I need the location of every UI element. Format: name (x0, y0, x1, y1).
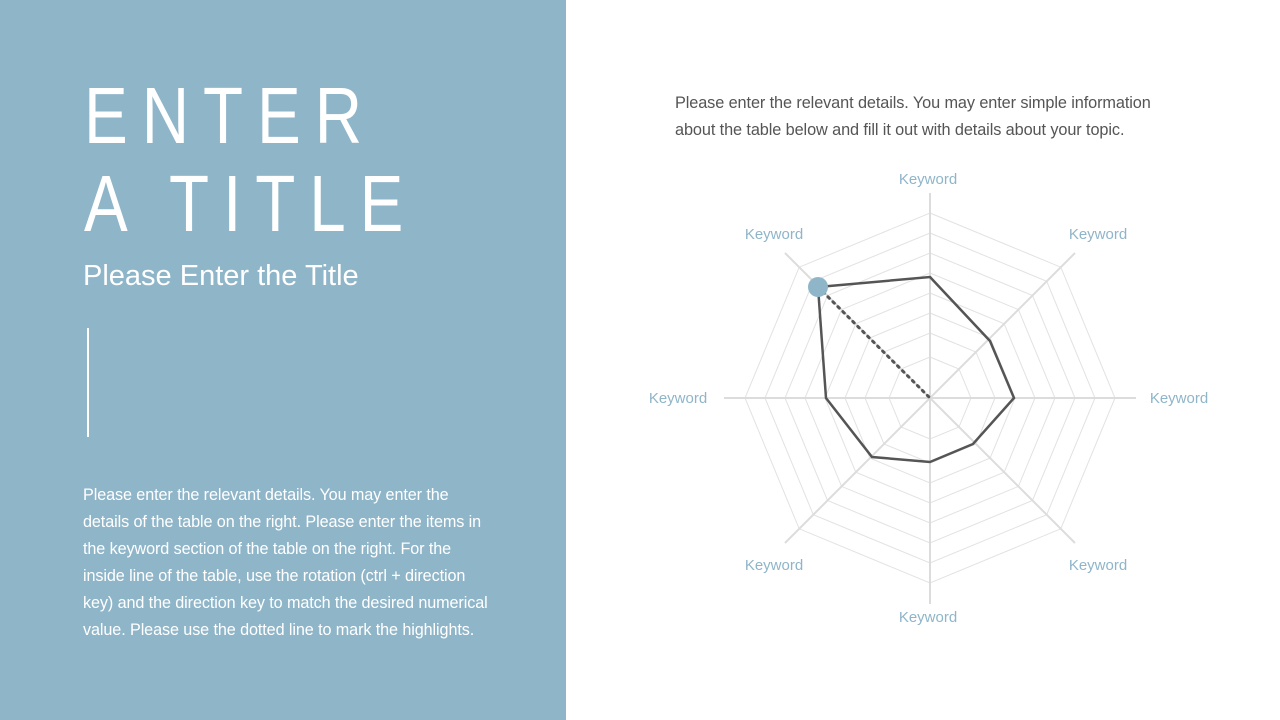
intro text: Please enter the relevant details. You may enter simple information (675, 94, 1151, 112)
body text: the keyword section of the table on the right. For the (83, 540, 451, 558)
keyword labels: Keyword (1069, 557, 1127, 574)
panel: left title panel (0, 0, 566, 720)
title: ENTER (84, 71, 376, 160)
intro text: about the table below and fill it out with details about your topic. (675, 121, 1124, 139)
keyword labels: Keyword (745, 557, 803, 574)
data polygon (818, 277, 1014, 462)
intro text (675, 94, 1151, 139)
keyword labels: Keyword (899, 609, 957, 626)
keyword labels: Keyword (1150, 390, 1208, 407)
keyword labels (649, 171, 1208, 626)
highlight dot (808, 277, 828, 297)
vertical accent line (87, 328, 89, 437)
highlight dotted line (818, 287, 930, 398)
keyword labels: Keyword (745, 226, 803, 243)
body text: inside line of the table, use the rotation (ctrl + direction (83, 567, 465, 585)
body text: details of the table on the right. Please enter the items in (83, 513, 481, 531)
body text: value. Please use the dotted line to mark the highlights. (83, 621, 474, 639)
keyword labels: Keyword (899, 171, 957, 188)
keyword labels: Keyword (1069, 226, 1127, 243)
body text: Please enter the relevant details. You may enter the (83, 486, 449, 504)
title: A TITLE (84, 159, 417, 248)
keyword labels: Keyword (649, 390, 707, 407)
subtitle: Please Enter the Title (83, 260, 359, 292)
title (84, 71, 417, 248)
body text (83, 486, 488, 639)
body text: key) and the direction key to match the desired numerical (83, 594, 488, 612)
